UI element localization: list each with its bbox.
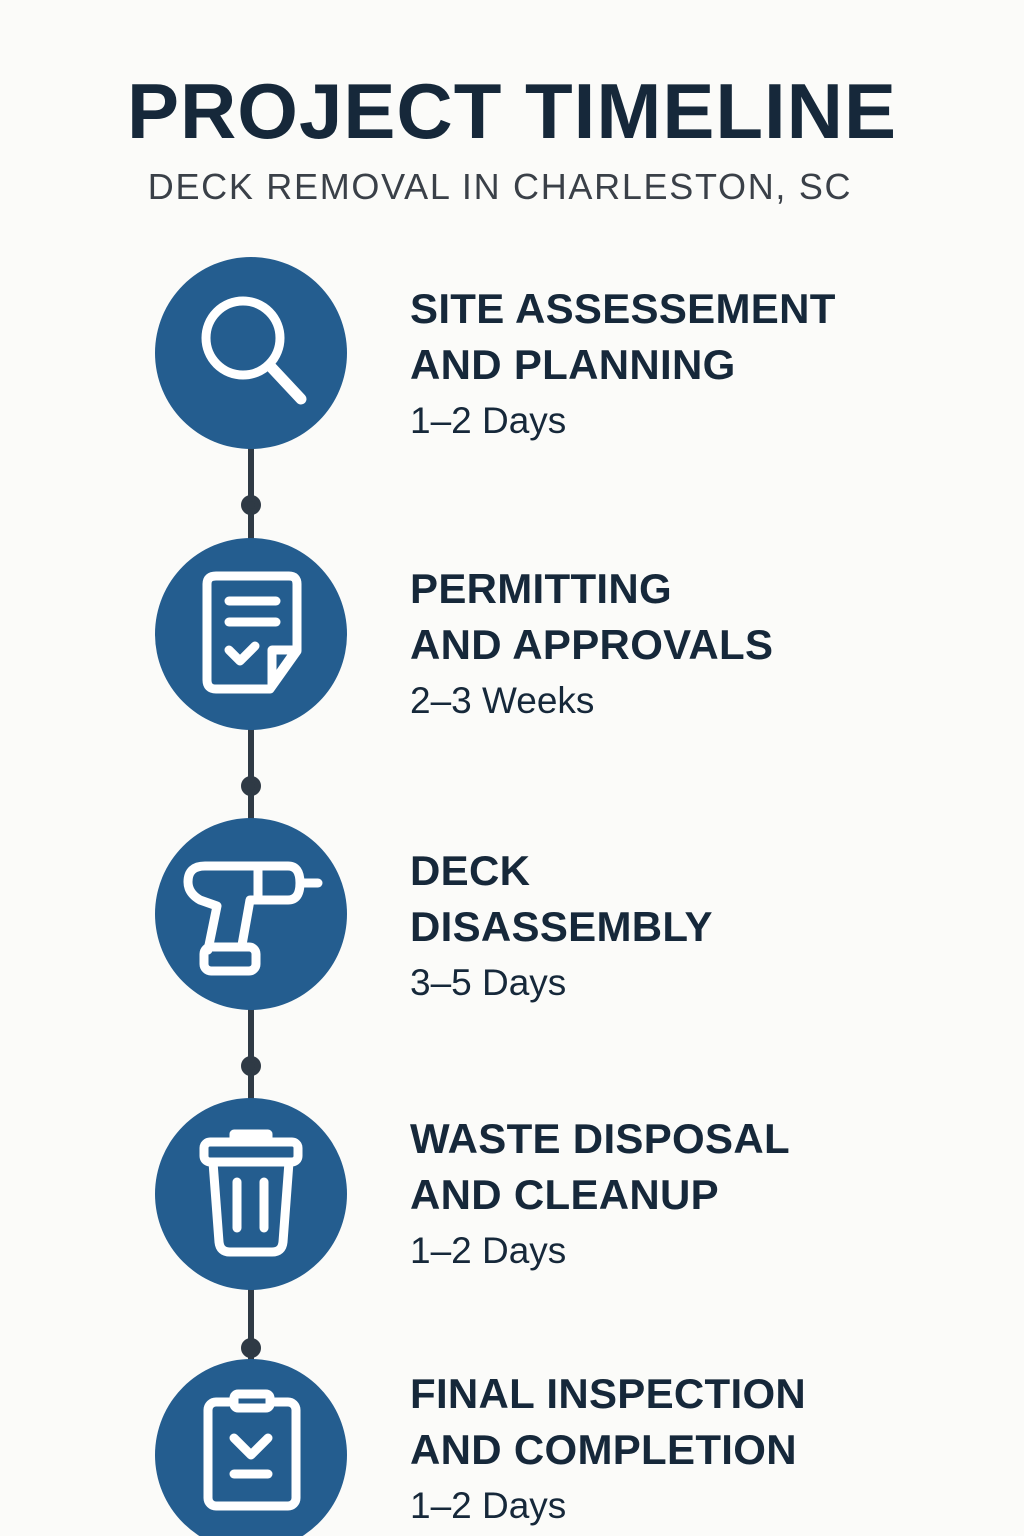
step 1 text: AND PLANNING: [410, 341, 736, 388]
subtitle: DECK REMOVAL IN CHARLESTON, SC: [148, 166, 852, 207]
step 2 text: PERMITTING: [410, 565, 672, 612]
step 5 text: AND COMPLETION: [410, 1426, 797, 1473]
step 1 text: SITE ASSESSEMENT: [410, 285, 836, 332]
step 4 text: WASTE DISPOSAL: [410, 1115, 790, 1162]
step 5 text: 1–2 Days: [410, 1485, 566, 1526]
icon: drill: [155, 818, 347, 1010]
step 2 text: 2–3 Weeks: [410, 680, 594, 721]
step 3 text: 3–5 Days: [410, 962, 566, 1003]
step 2 text: [410, 565, 773, 721]
step 4 text: [410, 1115, 790, 1271]
icon: clipboard: [155, 1359, 347, 1536]
step 4 text: 1–2 Days: [410, 1230, 566, 1271]
step 1 text: [410, 285, 836, 441]
step 4 text: AND CLEANUP: [410, 1171, 719, 1218]
step 3 text: DECK: [410, 847, 530, 894]
step 5 text: FINAL INSPECTION: [410, 1370, 806, 1417]
icon: permit document: [155, 538, 347, 730]
icon: search: [155, 257, 347, 449]
connector line: [244, 440, 258, 1380]
step 3 text: DISASSEMBLY: [410, 903, 713, 950]
step 5 text: [410, 1370, 806, 1526]
title: PROJECT TIMELINE: [127, 67, 897, 155]
step 1 text: 1–2 Days: [410, 400, 566, 441]
step 3 text: [410, 847, 713, 1003]
icon: trash: [155, 1098, 347, 1290]
step 2 text: AND APPROVALS: [410, 621, 773, 668]
